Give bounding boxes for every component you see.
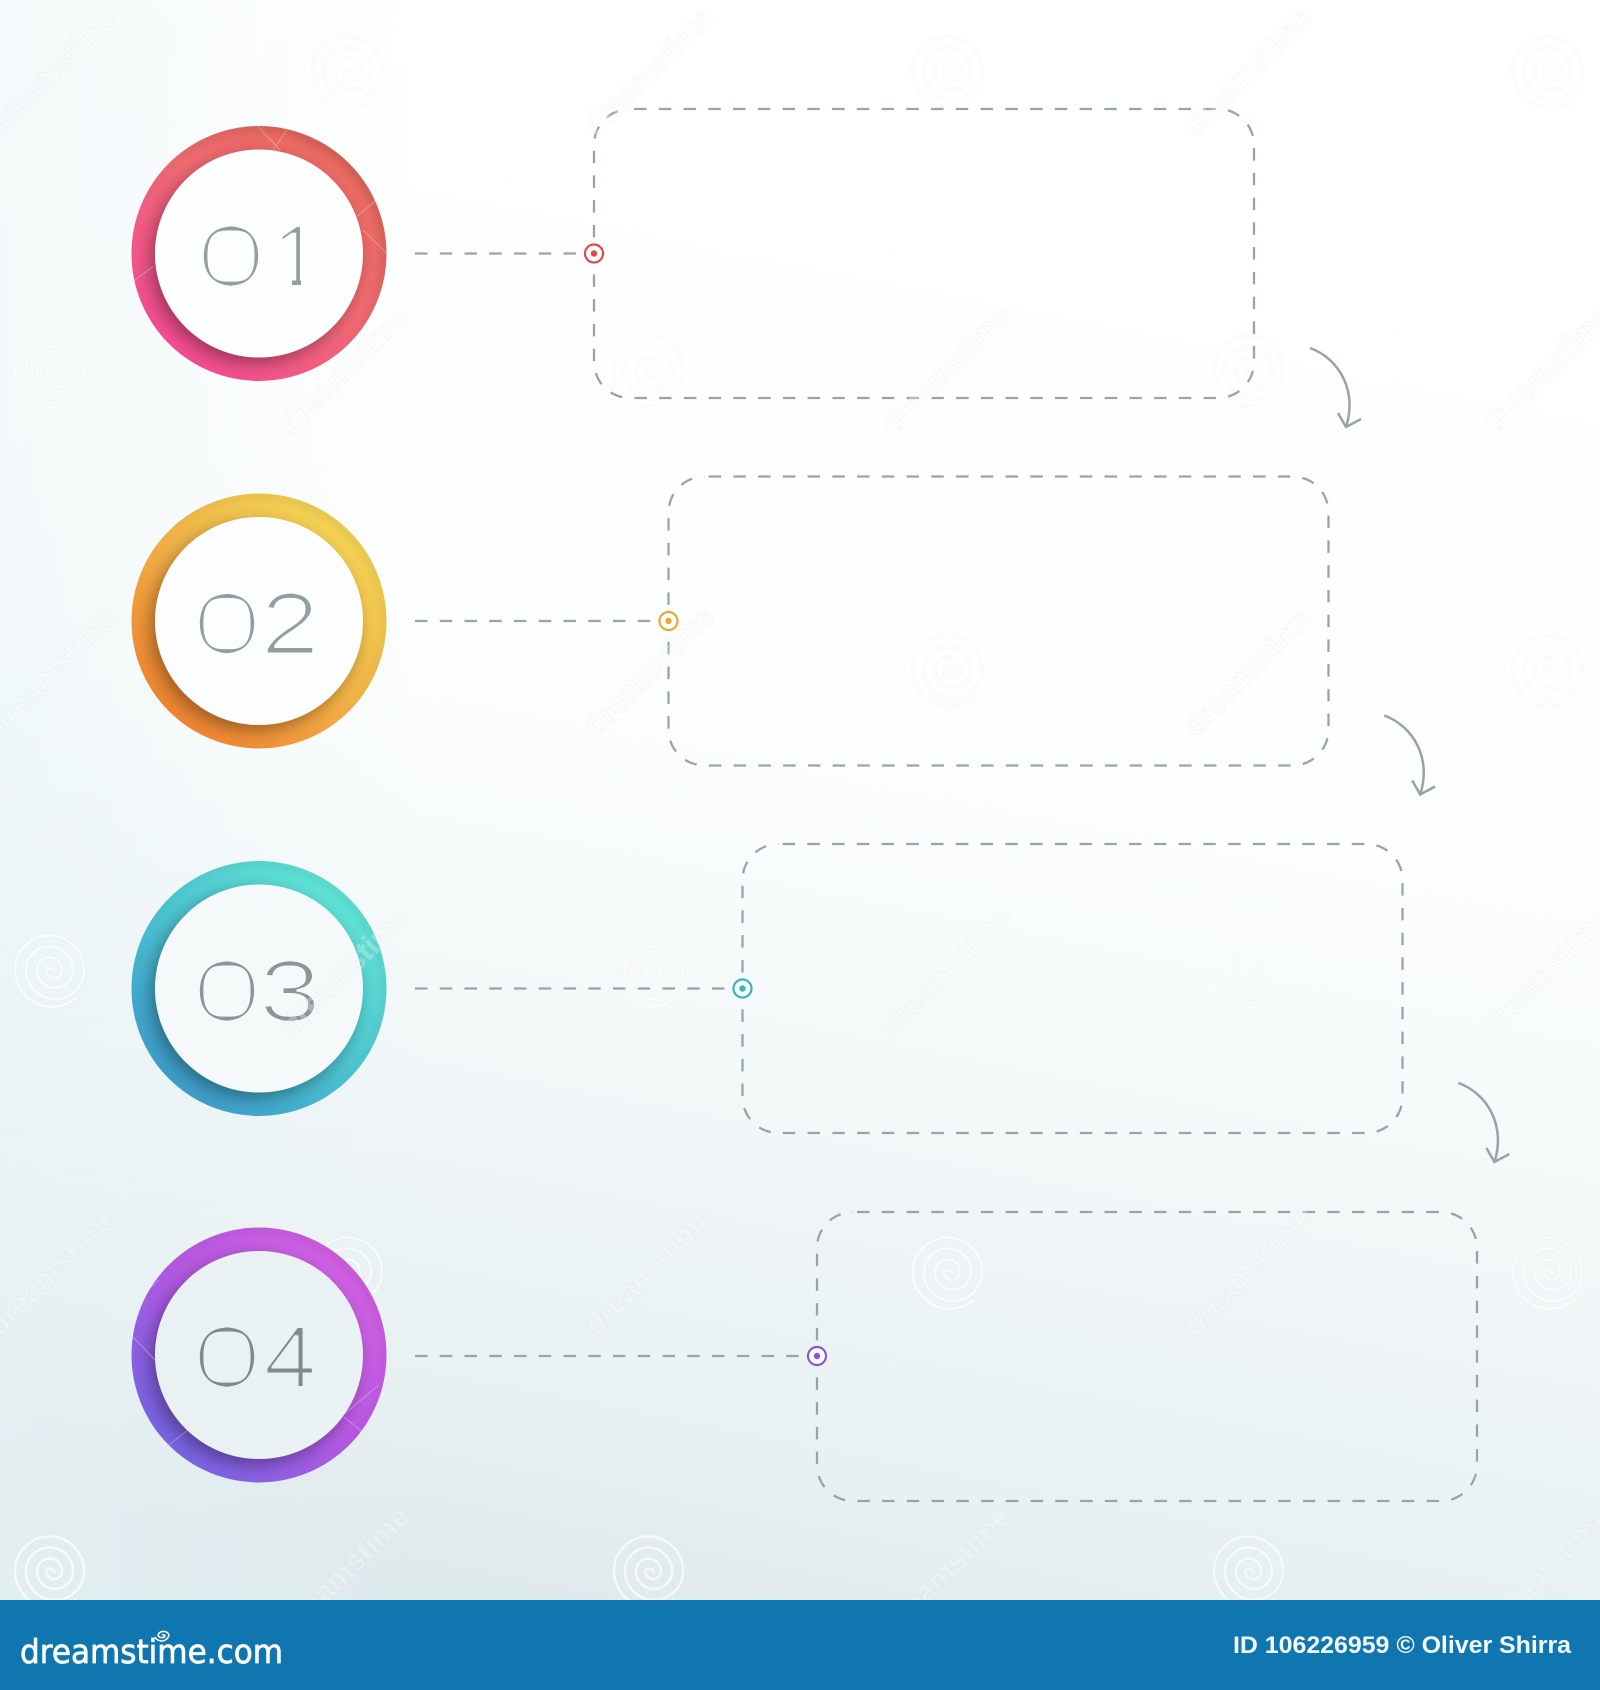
- watermark: text: dreamstime: [274, 299, 416, 441]
- watermark: text: dreamstime: [1177, 600, 1319, 742]
- watermark: text: dreamstime: [1177, 1200, 1319, 1342]
- ring 04: [132, 1228, 386, 1482]
- connector 1: [415, 252, 584, 255]
- node dot 4: [808, 1347, 826, 1365]
- circle 03: [132, 861, 386, 1116]
- number 03: [191, 943, 321, 1040]
- number 04: 0: [191, 1309, 263, 1406]
- watermark: text: dreamstime: [578, 600, 720, 742]
- panel: box 4: [817, 1212, 1477, 1501]
- number 01: 1: [272, 208, 321, 305]
- number 04: [191, 1309, 317, 1406]
- connector 4: [415, 1355, 807, 1357]
- panel: box 2: [668, 476, 1328, 766]
- watermark: text: dreamstime: [274, 900, 416, 1042]
- number 01: [204, 226, 301, 286]
- panel: box 3: [742, 844, 1402, 1133]
- node dot 3: [734, 980, 752, 998]
- connector 3: [415, 987, 732, 990]
- circle 01: [132, 126, 387, 381]
- number 03: 0: [191, 943, 263, 1040]
- node dot 1: [585, 244, 603, 262]
- number 04: 4: [263, 1309, 317, 1406]
- watermark: text: dreamstime: [875, 1500, 1017, 1642]
- number 02: 2: [260, 575, 320, 672]
- number 03: 3: [259, 943, 321, 1040]
- footer credit: ID 106226959 © Oliver Shirra: [1233, 1632, 1572, 1659]
- connector 2: [415, 620, 658, 622]
- ring 02: [132, 494, 386, 748]
- number 02: 0: [191, 575, 263, 672]
- arrow 2: [1384, 716, 1435, 794]
- watermark: text: dreamstime: [578, 1200, 720, 1342]
- circle 02: [132, 494, 386, 748]
- watermark: text: dreamstime: [875, 900, 1017, 1042]
- ring 01: [132, 126, 386, 381]
- circle 04: [131, 1228, 386, 1482]
- watermark: text: dreamstime: [578, 0, 720, 142]
- arrow 1: [1310, 348, 1361, 427]
- panel: box 1: [594, 109, 1254, 398]
- number 01: 0: [195, 208, 267, 305]
- watermark: text: dreamstime: [875, 299, 1017, 441]
- ring 03: [132, 861, 386, 1116]
- footer logo: dreamstime.com: [20, 1632, 283, 1671]
- footer bar: [0, 1600, 1600, 1690]
- arrow 3: [1458, 1083, 1509, 1162]
- node dot 2: [660, 612, 678, 630]
- watermark: text: dreamstime: [1177, 0, 1319, 142]
- number 02: [191, 575, 320, 672]
- watermark: text: dreamstime: [274, 1500, 416, 1642]
